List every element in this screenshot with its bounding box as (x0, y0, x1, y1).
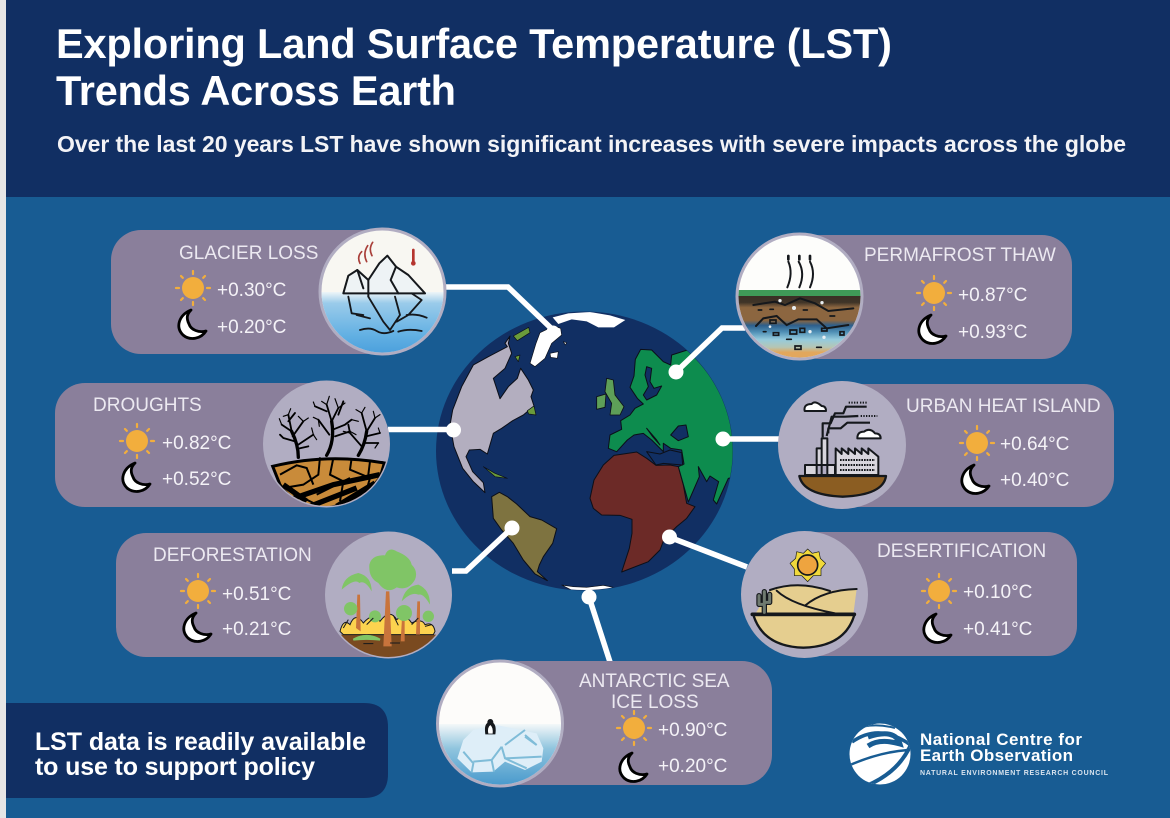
heading: glacier loss: GLACIER LOSS (179, 243, 318, 264)
panel: desertification (741, 531, 1077, 658)
logo globe mark (850, 724, 912, 786)
page background (6, 197, 1170, 818)
logo: National Centre for Earth Observation: National Centre for (920, 730, 1082, 749)
icon: sun (960, 426, 994, 460)
continent: Eurasia (608, 348, 733, 504)
panel: urban heat island (778, 381, 1114, 509)
daytime value: +0.64°C (1000, 434, 1069, 455)
logo: National Centre for Earth Observation: Earth Observation (920, 746, 1073, 765)
islands: Caribbean and Canada (483, 327, 536, 478)
icon: moon (620, 753, 647, 781)
icon: moon (179, 310, 206, 338)
daytime value: +0.90°C (658, 720, 727, 741)
nighttime value: +0.21°C (222, 619, 291, 640)
logo: National Centre for Earth Observation: NATURAL ENVIRONMENT RESEARCH COUNCIL (920, 770, 1109, 777)
daytime value: +0.51°C (222, 584, 291, 605)
inland seas (643, 367, 688, 465)
daytime value: +0.87°C (958, 285, 1027, 306)
icon: moon (919, 315, 946, 343)
panel: droughts (55, 380, 390, 508)
heading: deforestation: DEFORESTATION (153, 545, 312, 566)
nighttime value: +0.52°C (162, 469, 231, 490)
icon: moon (184, 613, 211, 641)
panel: antarctic sea ice loss (437, 661, 772, 786)
title: Trends Across Earth (56, 67, 456, 114)
panel: deforestation (116, 532, 452, 661)
icon: iceberg (320, 229, 445, 354)
nighttime value: +0.20°C (217, 317, 286, 338)
logo: National Centre for Earth Observation (850, 724, 1109, 786)
callout: policy message (6, 703, 388, 798)
nighttime value: +0.20°C (658, 756, 727, 777)
islands: UK and Ireland (597, 378, 624, 415)
header band (6, 0, 1170, 197)
icon: sun (181, 574, 215, 608)
connector lines (388, 287, 780, 662)
panel: glacier loss (111, 229, 445, 354)
heading: antarctic sea ice loss: ANTARCTIC SEA (579, 671, 730, 692)
title: Exploring Land Surface Temperature (LST) (56, 20, 892, 67)
nighttime value: +0.41°C (963, 619, 1032, 640)
icon: moon (924, 614, 951, 642)
callout: policy message: to use to support policy (35, 753, 315, 781)
icon: desert dunes (741, 531, 868, 658)
icon: sun (176, 271, 210, 305)
icon: thawing soil (737, 234, 863, 360)
ice: Arctic (553, 312, 625, 327)
ice: Antarctica (561, 584, 614, 590)
nighttime value: +0.93°C (958, 322, 1027, 343)
heading: urban heat island: URBAN HEAT ISLAND (906, 396, 1101, 417)
icon: moon (123, 463, 150, 491)
icon: penguin on ice (437, 661, 563, 786)
icon: factory (778, 381, 906, 509)
connector dots (446, 326, 730, 604)
icon: dead trees on cracked ground (263, 380, 390, 508)
icon: sun (922, 574, 956, 608)
daytime value: +0.10°C (963, 582, 1032, 603)
subtitle: Over the last 20 years LST have shown significant increases with severe impacts across the globe (57, 131, 1126, 157)
panel: permafrost thaw (737, 234, 1072, 360)
heading second line: ICE LOSS (611, 692, 699, 713)
continent: South America (492, 492, 557, 581)
globe (436, 312, 750, 592)
heading: desertification: DESERTIFICATION (877, 541, 1046, 562)
title (56, 20, 892, 114)
icon: sun (120, 424, 154, 458)
continent: Africa (590, 452, 695, 572)
heading: droughts: DROUGHTS (93, 395, 202, 416)
nighttime value: +0.40°C (1000, 470, 1069, 491)
icon: sun (917, 276, 951, 310)
daytime value: +0.30°C (217, 280, 286, 301)
icon: forest fire (325, 532, 452, 661)
icon: moon (962, 465, 989, 493)
continent: North America (450, 336, 534, 493)
ice: Greenland (530, 326, 567, 367)
icon: sun (617, 711, 651, 745)
heading: permafrost thaw: PERMAFROST THAW (864, 245, 1056, 266)
daytime value: +0.82°C (162, 433, 231, 454)
callout: policy message: LST data is readily available (35, 728, 366, 756)
